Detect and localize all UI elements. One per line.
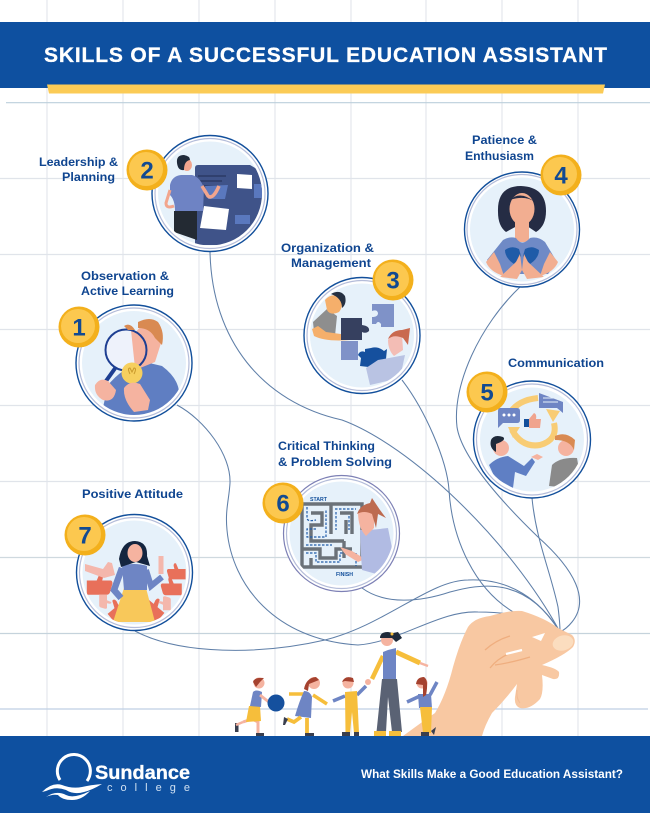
panel: skill 6 critical thinking and problem solving	[262, 439, 400, 592]
footer question: What Skills Make a Good Education Assistant?	[361, 769, 623, 781]
connecting strings	[135, 252, 580, 650]
illustration: teacher and children	[235, 632, 437, 736]
panel: skill 2 leadership and planning	[39, 136, 268, 252]
label: Patience &	[472, 133, 537, 147]
number badge 2: 2	[140, 158, 154, 184]
header banner	[0, 22, 650, 94]
label: Critical Thinking	[278, 439, 375, 453]
illustration: magnifier and light bulb	[95, 319, 179, 418]
panel: skill 5 communication	[466, 356, 604, 498]
title: SKILLS OF A SUCCESSFUL EDUCATION ASSISTANT	[44, 44, 607, 67]
yellow underline bar	[47, 84, 605, 94]
panel: skill 3 organization and management: Management	[291, 256, 371, 270]
maze start label: START	[310, 497, 328, 503]
teacher	[365, 632, 428, 736]
number badge 6: 6	[276, 490, 290, 518]
illustration: woman solving maze	[302, 498, 392, 575]
child with ball	[235, 678, 284, 736]
boy holding hands	[333, 677, 366, 736]
label: Organization &	[281, 241, 374, 255]
panel: skill 1 observation and active learning: Active Learning	[81, 284, 174, 298]
number badge 6	[262, 482, 304, 524]
illustration: team joining puzzle pieces	[312, 292, 410, 385]
maze finish label: FINISH	[336, 572, 353, 578]
label: Observation &	[81, 269, 169, 283]
illustration: calm woman with hands on heart	[486, 186, 558, 279]
illustration: hand holding strings	[403, 611, 575, 736]
number badge 7	[64, 514, 106, 556]
illustration: two people talking	[489, 393, 580, 488]
label: Leadership &	[39, 155, 118, 169]
footer banner	[0, 736, 650, 813]
label: Positive Attitude	[82, 487, 183, 501]
number badge 1: 1	[72, 314, 86, 342]
logo: Sundance College: college	[107, 782, 190, 794]
number badge 7: 7	[78, 522, 92, 550]
number badge 4	[540, 154, 582, 196]
number badge 5	[466, 372, 508, 412]
panel: skill 2 leadership and planning: Planning	[62, 170, 115, 184]
number badge 5: 5	[480, 380, 494, 406]
number badge 3	[372, 260, 414, 300]
panel: skill 1 observation and active learning	[58, 269, 192, 421]
illustration: woman surrounded by thumbs up	[85, 541, 186, 624]
panel: skill 6 critical thinking and problem solving: & Problem Solving	[278, 455, 392, 469]
number badge 1	[58, 306, 100, 348]
logo: Sundance College	[42, 755, 190, 800]
number badge 4: 4	[554, 162, 568, 190]
illustration: man at planning board	[166, 155, 262, 245]
number badge 3: 3	[386, 268, 400, 294]
panel: skill 4 patience and enthusiasm: Enthusiasm	[465, 149, 534, 163]
girl with arms up	[407, 677, 437, 736]
label: Communication	[508, 356, 604, 370]
panel: skill 4 patience and enthusiasm	[464, 133, 582, 287]
panel: skill 7 positive attitude	[64, 487, 192, 630]
panel: skill 3 organization and management	[281, 241, 420, 394]
number badge 2	[126, 150, 168, 190]
logo: Sundance College: Sundance	[95, 762, 190, 784]
girl running	[283, 677, 327, 736]
